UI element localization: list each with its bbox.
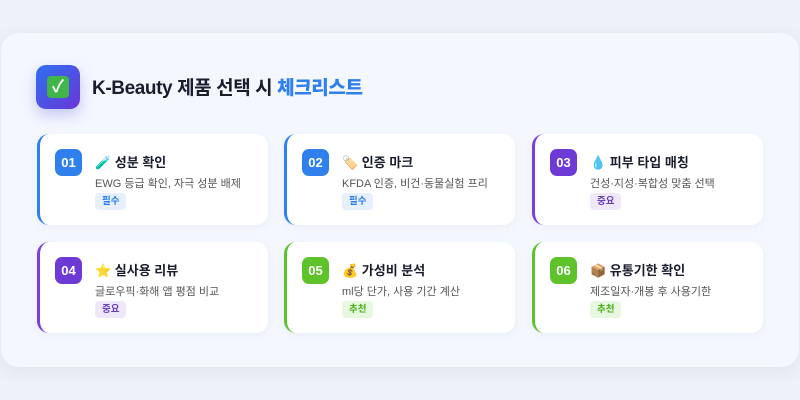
card 01: EWG 등급 확인, 자극 성분 배제 (95, 178, 241, 190)
card 02: 02 (308, 155, 323, 170)
card 03: 03 (556, 155, 571, 170)
card 02: KFDA 인증, 비건·동물실험 프리 (342, 178, 488, 190)
card 06: 제조일자·개봉 후 사용기한 (590, 286, 711, 298)
card 01 (37, 134, 268, 225)
card 05 (284, 242, 515, 333)
card 05: ml당 단가, 사용 기간 계산 (342, 286, 460, 298)
card 01: 필수 (102, 196, 119, 207)
card 01: 🧪 성분 확인 (95, 155, 166, 170)
card 03: 중요 (597, 196, 614, 207)
card 04 (37, 242, 268, 333)
card 04: 글로우픽·화해 앱 평점 비교 (95, 286, 219, 298)
card 06: 06 (556, 263, 571, 278)
card 05: 05 (308, 263, 323, 278)
card 02 (284, 134, 515, 225)
icon: check: ✓ (52, 77, 64, 96)
card 06: 추천 (597, 304, 614, 315)
card 06: 📦 유통기한 확인 (590, 263, 685, 278)
card 05: 💰 가성비 분석 (342, 263, 425, 278)
card 01: 01 (61, 155, 76, 170)
title: K-Beauty 제품 선택 시 체크리스트 (92, 78, 363, 99)
card 03 (532, 134, 763, 225)
card 02: 🏷️ 인증 마크 (342, 155, 413, 170)
card 03: 💧 피부 타입 매칭 (590, 155, 689, 170)
card 04: 04 (61, 263, 76, 278)
icon: check (36, 65, 80, 109)
card 04: 중요 (102, 304, 119, 315)
card 04: ⭐ 실사용 리뷰 (95, 263, 178, 278)
card 06 (532, 242, 763, 333)
card 05: 추천 (349, 304, 366, 315)
card 03: 건성·지성·복합성 맞춤 선택 (590, 178, 715, 190)
card 02: 필수 (349, 196, 366, 207)
